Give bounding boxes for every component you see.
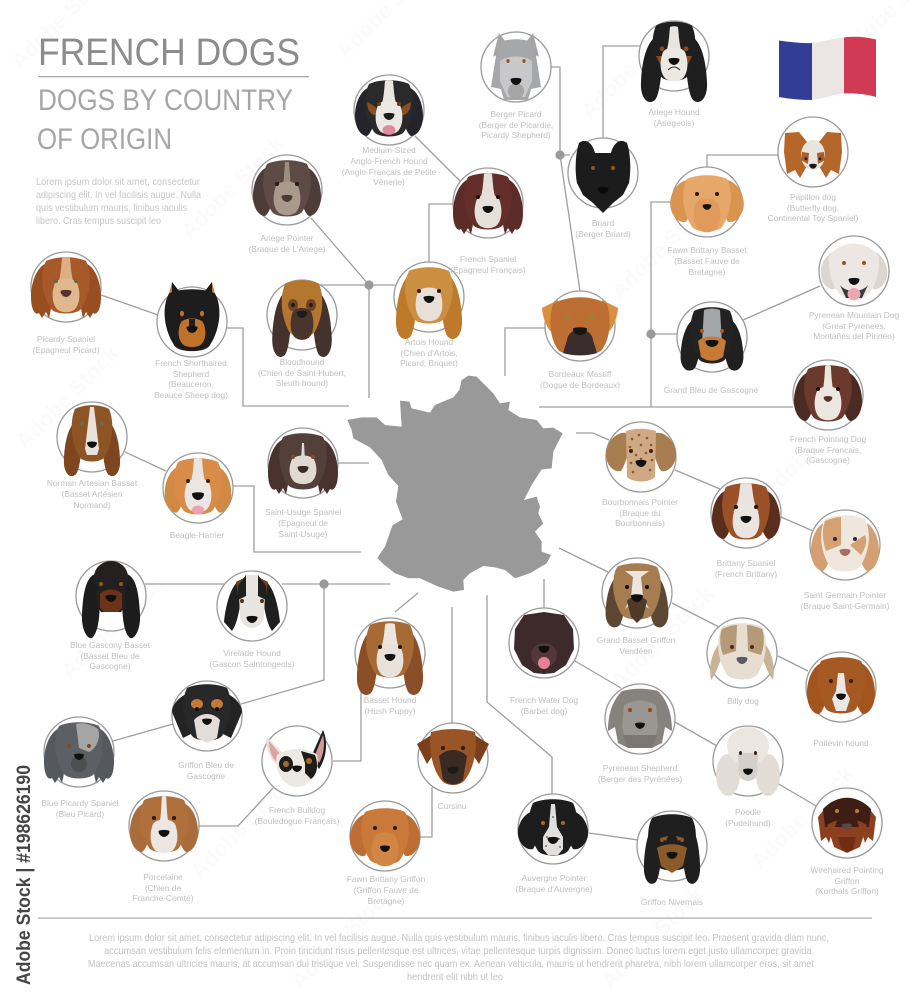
dog: French Pointing Dog: (Gascogne): [806, 455, 850, 465]
watermark pattern: Adobe Stock: [576, 10, 689, 124]
dog: Beagle-Harrier: Beagle-Harrier: [170, 530, 224, 540]
dog: Grand Basset Griffon Vendeen: Grand Basset Griffon: [597, 635, 676, 645]
watermark pattern: Adobe Stock: [286, 880, 399, 994]
dog: Bourbonnais Pointer: [602, 422, 678, 528]
dog: Poitevin Hound: [806, 652, 876, 748]
dog: Blue Gascony Basset: Blue Gascony Basset: [70, 640, 151, 650]
dog: Saint-Usuge Spaniel: Saint-Usuge Spaniel: [265, 507, 341, 517]
dog: Bourbonnais Pointer: Bourbonnais Pointer: [602, 497, 678, 507]
watermark pattern: Adobe Stock: [176, 130, 289, 244]
dog: Grand Basset Griffon Vendeen: Vendéen: [619, 646, 653, 656]
dog: Fawn Brittany Griffon: Fawn Brittany Griffon: [347, 874, 426, 884]
intro text: adipiscing elit. In vel facilisis augue. Nulla: [36, 190, 201, 201]
dog: Papillon: (Butterfly dog,: [787, 203, 839, 213]
dog: Pyrenean Shepherd: [598, 684, 682, 784]
dog: French Pointing Dog: (Braque Francais,: [795, 445, 861, 455]
subtitle: [37, 84, 293, 156]
dog: Pyrenean Mountain Dog: Montañés del Pirineo): [813, 331, 895, 341]
dog: French Bulldog: [255, 726, 340, 826]
watermark pattern: Adobe Stock: [186, 770, 299, 884]
watermark pattern: Adobe Stock: [606, 580, 719, 694]
dog: Grand Basset Griffon Vendeen: [597, 558, 676, 656]
dog: French Shorthaired Shepherd: [154, 282, 228, 400]
stock id text: Adobe Stock | #198626190: [14, 765, 35, 985]
dog: Saint Germain Pointer: [801, 510, 890, 611]
dog: Bourbonnais Pointer: (Braque du: [619, 508, 661, 518]
dog: Bloodhound: Bloodhound: [280, 357, 325, 367]
dog: French Shorthaired Shepherd: Beauce Sheep dog): [154, 390, 228, 400]
intro text: libero. Cras tempus suscipit leo: [36, 216, 161, 227]
dog: Basset Hound: Basset Hound: [364, 695, 417, 705]
intro text: quis vestibulum mauris, finibus iaculis: [36, 203, 187, 214]
dog: Papillon: Papillon dog: [790, 192, 836, 202]
dog: Fawn Brittany Griffon: Bretagne): [368, 896, 405, 906]
title: FRENCH DOGS: [38, 32, 300, 74]
dog: Beagle-Harrier: [163, 453, 233, 540]
dog: Fawn Brittany Basset: Bretagne): [689, 267, 726, 277]
dog: French Water Dog: [509, 608, 579, 716]
dog: French Water Dog: (Barbet dog): [521, 706, 567, 716]
dog: Blue Picardy Spaniel: Blue Picardy Spaniel: [41, 798, 119, 808]
dog: Fawn Brittany Basset: (Basset Fauve de: [674, 256, 740, 266]
dog: Bloodhound: Sleuth hound): [276, 378, 328, 388]
dog: Virelade Hound: Virelade Hound: [223, 648, 281, 658]
dog: French Shorthaired Shepherd: Shepherd: [173, 369, 209, 379]
watermark pattern: Adobe Stock: [56, 570, 169, 684]
dog: Blue Gascony Basset: [70, 561, 151, 671]
dog: Griffon Nivernais: Griffon Nivernais: [641, 897, 703, 907]
footer text: accumsan vestibulum felis elementum in. Proin tincidunt risus pellentesque est ultrices, vitae pellentesque turpis dignissim. Donec luctus lorem eget justo ullamcorper gravida.: [104, 946, 814, 957]
dog: Basset Hound: (Hush Puppy): [364, 706, 416, 716]
dog: Pyrenean Shepherd: Pyrenean Shepherd: [603, 763, 678, 773]
dog: Wirehaired Pointing Griffon: Griffon: [835, 876, 860, 886]
flag of France: [779, 37, 876, 100]
dog: Papillon: [768, 117, 859, 223]
dog: French Shorthaired Shepherd: French Shorthaired: [155, 358, 227, 368]
intro text: [36, 177, 201, 227]
dog: Fawn Brittany Griffon: (Griffon Fauve de: [353, 885, 419, 895]
dog: Bloodhound: [258, 280, 346, 388]
dog: Poitevin Hound: Poitevin hound: [813, 738, 869, 748]
dog: Grand Bleu de Gascogne: Grand Bleu de Gascogne: [664, 385, 759, 395]
dog: Cursinu: Cursinu: [438, 801, 467, 811]
dog: Papillon: Continental Toy Spaniel): [768, 213, 859, 223]
dog: Poodle: (Pudelhund): [725, 818, 771, 828]
dog: Virelade Hound: (Gascon Saintongeois): [209, 659, 295, 669]
dog: Medium-Sized Anglo-French Hound: Vênerie): [373, 177, 405, 187]
dog: Bordeaux Mastiff: Bordeaux Mastiff: [549, 369, 612, 379]
dog: Fawn Brittany Basset: Fawn Brittany Basset: [667, 245, 747, 255]
dog: Bordeaux Mastiff: (Dogue de Bordeaux): [540, 380, 620, 390]
dog: Medium-Sized Anglo-French Hound: [342, 75, 437, 187]
dog: Poodle: [713, 726, 783, 828]
dog: French Spaniel: French Spaniel: [460, 254, 516, 264]
footer text: Maecenas accumsan ultricies mauris, at accumsan dui tristique vel. Suspendisse nec quam ex. Aenean vehicula, mauris ut hendrerit pharetra, nibh lorem ullamcorper eros, sit amet: [88, 959, 814, 970]
footer text: hendrerit elit nibh ut leo: [407, 972, 503, 983]
dog: Pyrenean Mountain Dog: (Great Pyrenees,: [822, 321, 886, 331]
dog: Wirehaired Pointing Griffon: [810, 788, 884, 896]
dog: Ariege Pointer: (Braque de L'Ariege): [248, 244, 326, 254]
junction dots: [319, 150, 656, 589]
dog: Poodle: Poodle: [735, 807, 761, 817]
title rule: [38, 76, 309, 77]
dog: Saint-Usuge Spaniel: [265, 428, 341, 539]
dog: Bordeaux Mastiff: [540, 291, 620, 390]
dog: Saint Germain Pointer: (Braque Saint-Germain): [801, 601, 890, 611]
dog: Briard: (Berger Briard): [575, 229, 631, 239]
dog: French Shorthaired Shepherd: (Beauceron,: [168, 379, 214, 389]
dog: Pyrenean Mountain Dog: [809, 236, 899, 341]
footer text: [88, 933, 829, 983]
dog: Basset Hound: [355, 618, 425, 716]
dog: Artois Hound: (Chien d'Artois,: [400, 348, 458, 358]
dog: Brittany Spaniel: Brittany Spaniel: [717, 558, 775, 568]
footer text: Lorem ipsum dolor sit amet, consectetur adipiscing elit. In vel facilisis augue. Nulla quis vestibulum mauris, finibus iaculis libero. Cras tempus suscipit leo. Praesent gravida diam nunc,: [89, 933, 829, 944]
dog: Artois Hound: Picard, Briquet): [400, 358, 458, 368]
dog: Bloodhound: (Chien de Saint-Hubert,: [258, 368, 346, 378]
dog: French Bulldog: (Bouledogue Français): [255, 816, 340, 826]
dog: Medium-Sized Anglo-French Hound: Medium-Sized: [362, 145, 416, 155]
subtitle: DOGS BY COUNTRY: [38, 84, 293, 117]
dog: Blue Picardy Spaniel: [41, 717, 119, 819]
dog: Bourbonnais Pointer: Bourbonnais): [615, 518, 665, 528]
dog: Fawn Brittany Griffon: [347, 801, 426, 906]
dog: Griffon Bleu de Gascogne: [172, 681, 242, 781]
dog: Saint-Usuge Spaniel: Saint-Usuge): [279, 529, 328, 539]
dog: Wirehaired Pointing Griffon: Wirehaired Pointing: [810, 865, 884, 875]
dog: Porcelaine: Porcelaine: [143, 872, 183, 882]
dog: Billy: [707, 618, 777, 706]
dog: Porcelaine: [129, 791, 199, 903]
dog: Griffon Bleu de Gascogne: Gascogne: [187, 771, 225, 781]
dog: Picardy Spaniel: Picardy Spaniel: [37, 334, 95, 344]
watermark pattern: Adobe Stock: [11, 340, 124, 454]
dog: Blue Gascony Basset: (Basset Bleu de: [80, 651, 140, 661]
dog: Medium-Sized Anglo-French Hound: (Anglo-Français de Petite: [342, 167, 437, 177]
dog: Norman Artesian Basset: Normand): [73, 500, 111, 510]
dog: French Pointing Dog: French Pointing Dog: [790, 434, 867, 444]
dog: Ariege Pointer: Ariege Pointer: [260, 233, 314, 243]
dog: Billy: Billy dog: [727, 696, 759, 706]
dog: Medium-Sized Anglo-French Hound: Anglo-French Hound: [350, 156, 428, 166]
dog: Brittany Spaniel: (French Brittany): [715, 569, 777, 579]
dog: Pyrenean Mountain Dog: Pyrenean Mountain Dog: [809, 310, 899, 320]
connector lines: [101, 46, 820, 840]
dog: Ariege Pointer: [248, 155, 326, 254]
dog: Picardy Spaniel: [31, 252, 101, 355]
dog: Briard: Briard: [592, 218, 615, 228]
dog: Pyrenean Shepherd: (Berger des Pyrénées): [598, 774, 682, 784]
dog: Brittany Spaniel: [711, 478, 781, 579]
dog: Ariege Hound: (Ariegeois): [654, 118, 694, 128]
intro text: Lorem ipsum dolor sit amet, consectetur: [36, 177, 200, 188]
dog: French Pointing Dog: [790, 360, 867, 465]
dog: Berger Picard: (Berger de Picardie,: [479, 120, 553, 130]
dog: Cursinu: [417, 723, 489, 811]
dog: Norman Artesian Basset: (Basset Artésien: [62, 489, 123, 499]
dog: Saint-Usuge Spaniel: (Epagneul de: [278, 518, 328, 528]
dog: French Spaniel: (Épagneul Français): [450, 265, 526, 275]
watermark pattern: Adobe Stock: [756, 390, 869, 504]
dog: Porcelaine: (Chien de: [145, 883, 181, 893]
dog: Auvergne Pointer: Auvergne Pointer: [522, 873, 587, 883]
dog: Auvergne Pointer: (Braque d'Auvergne): [515, 884, 593, 894]
dog: Auvergne Pointer: [515, 794, 593, 894]
dog: Artois Hound: [394, 262, 464, 368]
dog: Grand Bleu de Gascogne: [664, 302, 759, 395]
dog: Norman Artesian Basset: [47, 402, 138, 510]
dog: Virelade Hound: [209, 571, 295, 669]
subtitle: OF ORIGIN: [37, 123, 172, 156]
dog: Fawn Brittany Basset: [667, 167, 747, 277]
dog: Ariege Hound: Ariege Hound: [648, 107, 700, 117]
watermark pattern: Adobe Stock: [746, 760, 859, 874]
watermark pattern: Adobe Stock: [606, 190, 719, 304]
map of France: [347, 376, 563, 592]
dog: Berger Picard: [479, 32, 553, 140]
dog: Griffon Bleu de Gascogne: Griffon Bleu de: [178, 760, 234, 770]
dog: Briard: [568, 138, 638, 239]
dog: Griffon Nivernais: [637, 811, 707, 907]
dog: French Water Dog: French Water Dog: [510, 695, 578, 705]
dog: Saint Germain Pointer: Saint Germain Pointer: [804, 590, 886, 600]
dog: Picardy Spaniel: (Épagneul Picard): [32, 345, 100, 355]
dog: Norman Artesian Basset: Norman Artesian Basset: [47, 478, 138, 488]
dog: Blue Gascony Basset: Gascogne): [90, 661, 131, 671]
dog: Berger Picard: Berger Picard: [490, 109, 542, 119]
bottom rule: [38, 918, 872, 919]
dog: Artois Hound: Artois Hound: [405, 337, 454, 347]
dog: Wirehaired Pointing Griffon: (Korthals Griffon): [815, 886, 879, 896]
dog: French Spaniel: [450, 168, 526, 275]
dog: Blue Picardy Spaniel: (Bleu Picard): [56, 809, 104, 819]
watermark pattern: Adobe Stock: [596, 880, 709, 994]
dog: Porcelaine: Franche-Comté): [133, 893, 194, 903]
dog: French Bulldog: French Bulldog: [269, 805, 326, 815]
dog: Berger Picard: Picardy Shepherd): [481, 130, 551, 140]
dog: Ariege Hound: [639, 21, 709, 128]
